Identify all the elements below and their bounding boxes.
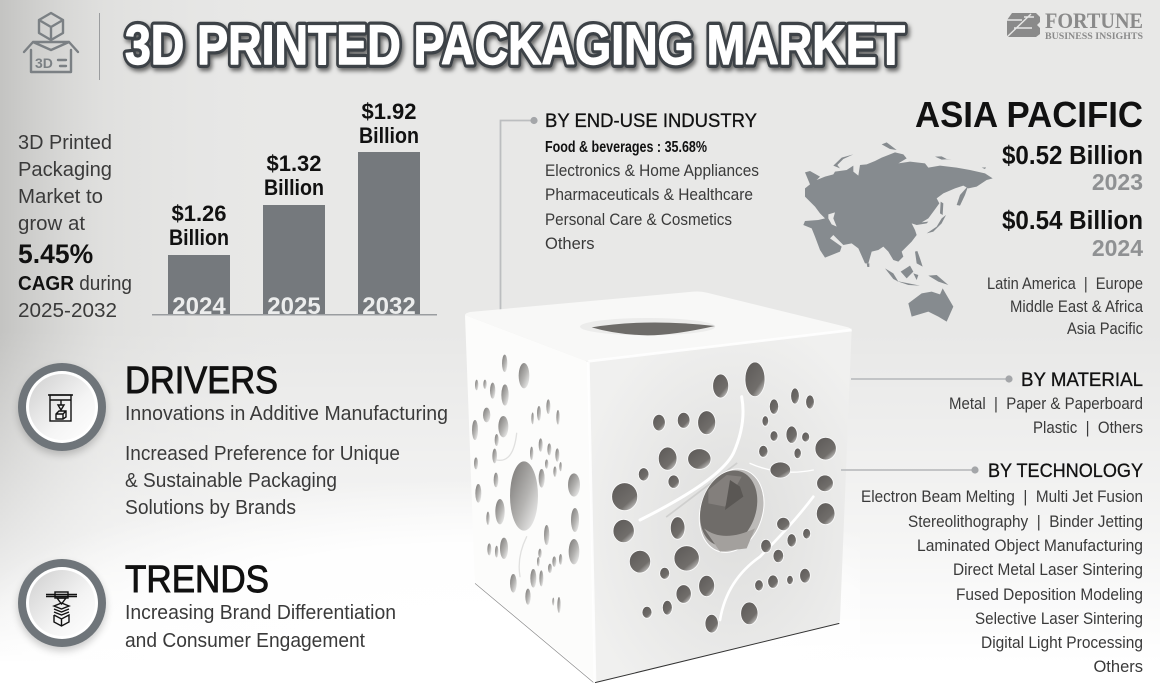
bar 2024 bbox=[168, 201, 230, 320]
text block: drivers: Solutions by Brands bbox=[125, 497, 296, 519]
bar 2024: 2024 bbox=[172, 293, 226, 320]
icon: trends printer bbox=[18, 559, 106, 651]
panel: Asia Pacific bbox=[803, 94, 1144, 338]
bar 2025: Billion bbox=[264, 175, 324, 200]
panel: trends bbox=[18, 559, 396, 652]
text block: CAGR: 2025-2032 bbox=[18, 300, 117, 322]
bar 2032: Billion bbox=[359, 123, 419, 148]
panel: by material: Plastic | Others bbox=[1033, 419, 1143, 437]
panel: by material: BY MATERIAL bbox=[1021, 369, 1143, 391]
title: 3D PRINTED PACKAGING MARKET bbox=[125, 13, 905, 76]
panel: by end-use industry: Personal Care & Cosmetics bbox=[545, 211, 732, 229]
panel: by technology: Digital Light Processing bbox=[981, 634, 1143, 652]
panel: by technology: BY TECHNOLOGY bbox=[988, 460, 1143, 482]
panel: by end-use industry: Others bbox=[545, 235, 595, 253]
bar 2032: $1.92 bbox=[362, 99, 416, 124]
text block: regions bbox=[987, 275, 1144, 338]
text block: trends: Increasing Brand Differentiation bbox=[125, 602, 396, 624]
bar 2025: $1.32 bbox=[266, 151, 322, 176]
bar 2032 bbox=[358, 99, 420, 320]
icon: drivers printer bbox=[18, 363, 106, 455]
connector dot: material bbox=[1005, 375, 1013, 383]
panel: by technology: Direct Metal Laser Sintering bbox=[953, 561, 1143, 579]
stat: 2023: 2023 bbox=[1092, 169, 1143, 195]
panel: by technology bbox=[861, 460, 1143, 676]
bar 2024: Billion bbox=[169, 225, 229, 250]
surface folds bbox=[497, 397, 813, 620]
cube top face bbox=[465, 291, 851, 361]
text block: CAGR: 5.45% bbox=[18, 239, 93, 269]
connector: technology bbox=[841, 469, 972, 471]
panel: by technology: Stereolithography | Binder Jetting bbox=[908, 513, 1143, 531]
panel: by end-use industry: Electronics & Home Appliances bbox=[545, 162, 759, 180]
icon: 3D box: 3D bbox=[35, 55, 53, 71]
stat: 2024: 2024 bbox=[1092, 235, 1143, 261]
panel: by technology: Fused Deposition Modeling bbox=[956, 586, 1143, 604]
text block: trends: and Consumer Engagement bbox=[125, 630, 365, 652]
text block: drivers: Increased Preference for Unique bbox=[125, 443, 400, 465]
stat: 2024 bbox=[1002, 207, 1143, 261]
text block: CAGR: Packaging bbox=[18, 159, 112, 181]
panel: by end-use industry: Pharmaceuticals & Healthcare bbox=[545, 186, 753, 204]
holes: left face bbox=[472, 355, 580, 613]
panel: by end-use industry: Food & beverages : 35.68% bbox=[545, 139, 707, 156]
panel: by technology: Electron Beam Melting | Multi Jet Fusion bbox=[861, 488, 1143, 506]
panel: by end-use industry: BY END-USE INDUSTRY bbox=[545, 110, 757, 132]
bar chart bbox=[152, 99, 437, 320]
icon: 3D box bbox=[24, 13, 78, 72]
logo: Fortune Business Insights bbox=[1006, 8, 1143, 42]
panel: drivers bbox=[18, 360, 448, 519]
logo: Fortune Business Insights: BUSINESS INSIGHTS bbox=[1045, 31, 1143, 42]
text block: CAGR: CAGR during bbox=[18, 273, 132, 295]
cube right face bbox=[588, 330, 852, 682]
heading: drivers: DRIVERS bbox=[125, 360, 278, 402]
panel: by technology: Laminated Object Manufacturing bbox=[917, 537, 1143, 555]
cube bbox=[465, 291, 852, 683]
panel: by material: Metal | Paper & Paperboard bbox=[949, 395, 1143, 413]
bar 2025 bbox=[263, 151, 325, 320]
text block: regions: Latin America | Europe bbox=[987, 275, 1143, 293]
text block: regions: Middle East & Africa bbox=[1010, 298, 1144, 316]
cube left face bbox=[465, 315, 595, 682]
title: 3D PRINTED PACKAGING MARKET bbox=[125, 13, 905, 76]
panel: by end-use industry bbox=[545, 110, 759, 253]
stat: 2024: $0.54 Billion bbox=[1002, 207, 1143, 235]
heading: Asia Pacific: ASIA PACIFIC bbox=[915, 94, 1143, 135]
text block: trends bbox=[125, 602, 396, 652]
logo: Fortune Business Insights: FORTUNE bbox=[1045, 8, 1143, 33]
text block: CAGR: 3D Printed bbox=[18, 132, 112, 154]
text block: regions: Asia Pacific bbox=[1067, 320, 1143, 338]
holes: right face bbox=[612, 362, 836, 633]
text block: CAGR: Market to bbox=[18, 186, 103, 208]
connector dot: end-use bbox=[530, 117, 538, 124]
stat: 2023: $0.52 Billion bbox=[1002, 142, 1143, 170]
text block: CAGR: grow at bbox=[18, 213, 85, 235]
text block: drivers: & Sustainable Packaging bbox=[125, 470, 337, 492]
stat: 2023 bbox=[1002, 142, 1143, 195]
bar 2024: $1.26 bbox=[172, 201, 226, 226]
heading: trends: TRENDS bbox=[125, 559, 269, 601]
panel: by technology: Selective Laser Sintering bbox=[975, 610, 1143, 628]
panel: by technology: Others bbox=[1093, 658, 1143, 676]
map: Asia Pacific bbox=[803, 142, 993, 322]
text block: CAGR bbox=[18, 132, 132, 322]
connector: material bbox=[851, 378, 1006, 380]
connector: end-use bbox=[500, 120, 532, 312]
header divider bbox=[99, 13, 100, 80]
bar 2025: 2025 bbox=[267, 293, 321, 320]
top opening bbox=[580, 318, 715, 335]
hole: large centre bbox=[689, 461, 774, 561]
connector dot: technology bbox=[971, 466, 979, 474]
text block: drivers bbox=[125, 403, 448, 519]
text block: drivers: Innovations in Additive Manufacturing bbox=[125, 403, 448, 425]
bar 2032: 2032 bbox=[362, 293, 416, 320]
panel: by material bbox=[949, 369, 1143, 437]
